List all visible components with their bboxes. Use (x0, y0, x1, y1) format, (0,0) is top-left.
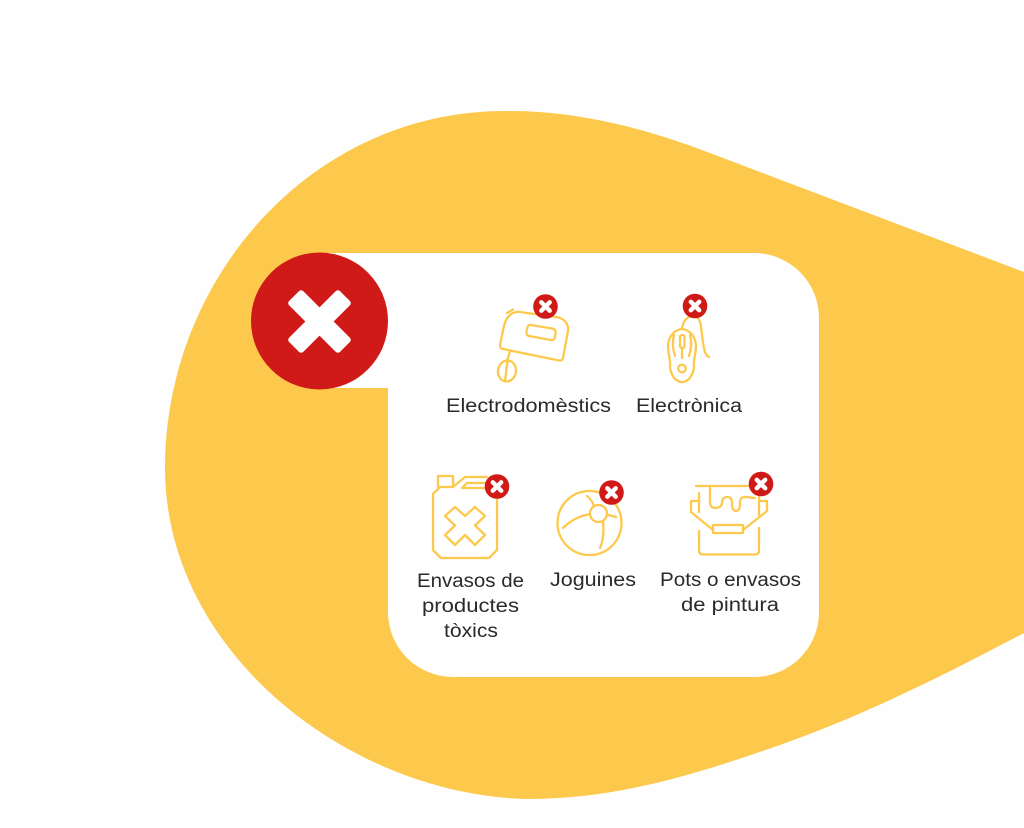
item: Envasos de productes tòxics: tòxics (444, 621, 498, 642)
item: Electrònica (636, 294, 742, 417)
item: Envasos de productes tòxics: productes (422, 596, 519, 617)
icon: red cross small (749, 472, 773, 496)
icon: paint bucket (691, 486, 767, 554)
icon: computer mouse (668, 316, 709, 382)
panel: white list card (320, 253, 819, 677)
label: Joguines (550, 570, 636, 591)
label: Electrodomèstics (446, 396, 611, 417)
icon: hand mixer (496, 310, 568, 383)
icon: toxic jerrycan (433, 476, 497, 558)
item: Electrodomèstics (446, 294, 611, 417)
item: Pots o envasos de pintura (660, 472, 801, 616)
icon: red cross small (599, 480, 624, 505)
label: Envasos de (417, 571, 524, 592)
icon: red cross small (485, 474, 509, 499)
icon: beach ball (558, 491, 622, 555)
icon: red cross small (533, 294, 558, 319)
item: Pots o envasos de pintura: de pintura (681, 595, 779, 616)
label: Pots o envasos (660, 570, 801, 591)
item: Envasos de productes tòxics (417, 474, 524, 642)
icon: red cross small (683, 294, 707, 318)
yellow background blob (165, 111, 1024, 799)
label: Electrònica (636, 396, 742, 417)
item: Joguines (550, 480, 636, 591)
icon: large red cross badge (251, 252, 388, 390)
